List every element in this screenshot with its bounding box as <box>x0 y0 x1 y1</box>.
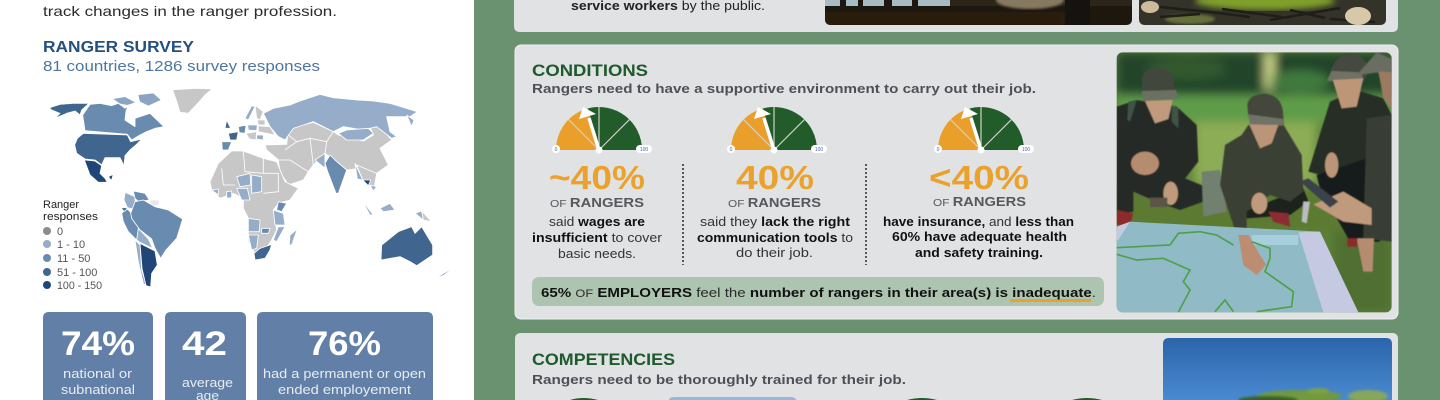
map legend: responses <box>43 211 99 223</box>
heading: conditions: CONDITIONS <box>532 62 648 80</box>
text block: conditions intro: Rangers need to have a supportive environment to carry out their job. <box>532 81 1036 96</box>
panel: conditions <box>515 45 1398 319</box>
heading: competencies: COMPETENCIES <box>532 351 675 369</box>
stat card: 76% <box>257 312 433 400</box>
map legend: Ranger <box>43 199 79 211</box>
gauge: about 40 percent, wages <box>552 107 652 154</box>
statistic: about 40 percent wages <box>532 159 662 261</box>
statistic: about 40 percent wages: ~40% <box>549 159 645 196</box>
gauge: 40 percent, communication tools: 100 <box>815 147 823 153</box>
gauge: about 40 percent, wages: 0 <box>555 147 558 153</box>
statistic: 40 percent communication tools: OF RANGERS <box>728 195 821 210</box>
text block: competencies intro: Rangers need to be thoroughly trained for their job. <box>532 372 906 387</box>
gauge: under 40 percent, insurance: 0 <box>937 147 940 153</box>
text block: survey scope: 81 countries, 1286 survey responses <box>43 59 320 75</box>
gauge: competencies second, top edge <box>907 398 937 400</box>
statistic: 40 percent communication tools: 40% <box>736 159 814 196</box>
map legend: 11 - 50 <box>57 253 90 265</box>
statistic: under 40 percent insurance: have insurance, and less than <box>883 215 1074 229</box>
stat card: 74%: national or <box>63 367 132 381</box>
panel: competencies <box>515 333 1398 400</box>
stat card: 42: 42 <box>182 325 227 363</box>
gauge: 40 percent, communication tools: 0 <box>730 147 733 153</box>
panel: green main background <box>474 0 1440 400</box>
map legend: 1 - 10 <box>57 239 85 251</box>
map legend: 0 <box>57 226 63 238</box>
stat card: 74%: 74% <box>61 325 135 363</box>
gauge: 40 percent, communication tools <box>727 107 827 154</box>
stat card: 74% <box>43 312 153 400</box>
photo: mossy log with fungi <box>1139 0 1386 25</box>
statistic: 40 percent communication tools: communication tools to <box>697 231 853 245</box>
statistic: about 40 percent wages: OF RANGERS <box>550 195 644 210</box>
gauge: under 40 percent, insurance: 100 <box>1022 147 1030 153</box>
map legend: 100 - 150 <box>57 280 102 292</box>
statistic: under 40 percent insurance: <40% <box>929 159 1029 196</box>
statistic: 40 percent communication tools <box>697 159 853 260</box>
stat card: 76%: had a permanent or open <box>263 367 426 381</box>
callout: competencies blue box top edge <box>669 397 796 400</box>
statistic: 40 percent communication tools: said they lack the right <box>700 215 851 229</box>
gauge: competencies third, top edge <box>1072 398 1102 400</box>
photo: blue sky and tree <box>1163 338 1392 400</box>
statistic: about 40 percent wages: insufficient to cover <box>532 231 662 245</box>
stat card: 42: average <box>182 376 233 390</box>
photo: rangers reading a map <box>1117 52 1392 312</box>
panel: survey sidebar background <box>0 0 474 400</box>
gauge: under 40 percent, insurance <box>934 107 1034 154</box>
callout: employers <box>532 277 1104 306</box>
statistic: about 40 percent wages: said wages are <box>549 215 645 229</box>
statistic: under 40 percent insurance: and safety training. <box>915 246 1043 260</box>
heading: ranger survey: RANGER SURVEY <box>43 39 194 56</box>
gauge: competencies first, top edge <box>570 398 598 400</box>
world map <box>49 88 455 288</box>
statistic: 40 percent communication tools: do their job. <box>736 246 813 260</box>
statistic: under 40 percent insurance <box>883 159 1074 260</box>
stat card: 76%: 76% <box>308 325 381 363</box>
stat card: 42 <box>165 312 246 400</box>
statistic: about 40 percent wages: basic needs. <box>558 247 636 261</box>
text block: survey intro: track changes in the ranger profession. <box>43 3 337 19</box>
photo: dark forest <box>825 0 1132 25</box>
statistic: under 40 percent insurance: 60% have adequate health <box>892 230 1067 244</box>
map legend: 51 - 100 <box>57 267 97 279</box>
stat card: 76%: ended employement <box>278 383 412 397</box>
map legend <box>43 199 102 292</box>
panel: top card <box>514 0 1398 32</box>
gauge: about 40 percent, wages: 100 <box>640 147 648 153</box>
callout: employers: 65% OF EMPLOYERS feel the number of rangers in their area(s) is inadequate . <box>541 285 1096 300</box>
statistic: under 40 percent insurance: OF RANGERS <box>933 194 1026 209</box>
stat card: 74%: subnational <box>61 383 135 397</box>
